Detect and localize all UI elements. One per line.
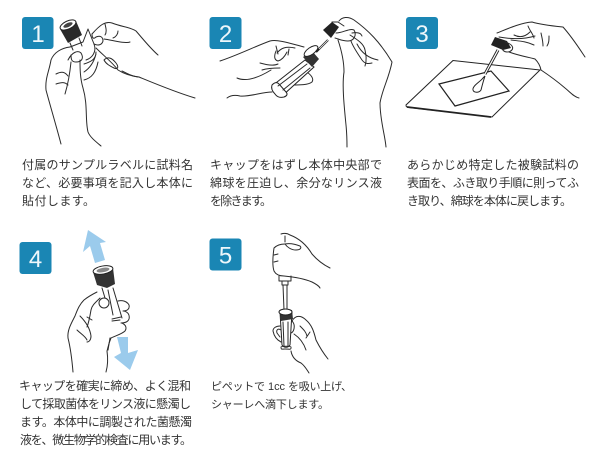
badge: step 4 — [20, 242, 52, 274]
icon: tube with cap — [92, 264, 122, 318]
icon: tube body — [272, 40, 328, 97]
text: step 5: を吸い上げ、 — [288, 380, 352, 393]
illustration: wiping test surface with swab — [406, 22, 585, 117]
icon: up arrow — [83, 230, 106, 263]
panel: step 3 — [406, 17, 585, 208]
icon: test surface sheet — [406, 60, 540, 117]
text: step 3: 表面を、ふき取り手順に則ってふ — [407, 176, 579, 190]
text: step 3: き取り、綿球を本体に戻します。 — [407, 193, 572, 208]
text: step 4: キャップを確実に締め、よく混和 — [19, 378, 191, 393]
icon: tube with cap — [279, 309, 293, 349]
text: step 3: あらかじめ特定した被験試料の — [407, 157, 579, 172]
panel: step 1 — [22, 17, 195, 208]
illustration: pipette dropping liquid — [273, 233, 330, 373]
icon: down arrow — [114, 337, 138, 370]
illustration: hands holding tube and label — [46, 18, 195, 146]
icon: tube cap — [59, 18, 82, 50]
text: step 5: 1cc — [268, 381, 286, 393]
badge: step 2 — [210, 17, 242, 49]
illustration: removing cap from tube — [220, 17, 392, 147]
icon: swab — [473, 37, 511, 92]
text: step 5: シャーレへ滴下します。 — [211, 397, 329, 411]
text: step 1: 貼付します。 — [22, 193, 95, 208]
text: step 2: キャップをはずし本体中央部で — [210, 157, 382, 172]
badge: step 1: 1 — [31, 21, 45, 48]
panel: step 5 — [210, 233, 352, 411]
text: step 5: ピペットで — [211, 380, 265, 393]
icon: cap with swab — [323, 22, 344, 38]
badge: step 4: 4 — [29, 246, 42, 273]
badge: step 5: 5 — [219, 242, 232, 270]
badge: step 1 — [22, 17, 54, 49]
text: step 4: 液を、微生物学的検査に用います。 — [20, 432, 192, 447]
text: step 4: して採取菌体をリンス液に懸濁し — [20, 397, 191, 411]
panel: step 2 — [210, 17, 392, 208]
text: step 2: 綿球を圧迫し、余分なリンス液 — [210, 175, 382, 190]
badge: step 3: 3 — [415, 21, 429, 48]
badge: step 3 — [406, 17, 438, 49]
text: step 2: を除きます。 — [210, 194, 272, 208]
panel: step 4 — [19, 230, 192, 447]
text: step 1: など、必要事項を記入し本体に — [22, 176, 193, 190]
text: step 1: 付属のサンプルラベルに試料名 — [22, 157, 193, 172]
icon: pipette — [279, 233, 291, 310]
badge: step 2: 2 — [219, 21, 232, 48]
badge: step 5 — [210, 238, 242, 270]
illustration: hand shaking tube — [68, 264, 129, 372]
text: step 4: ます。本体中に調製された菌懸濁 — [20, 414, 192, 429]
